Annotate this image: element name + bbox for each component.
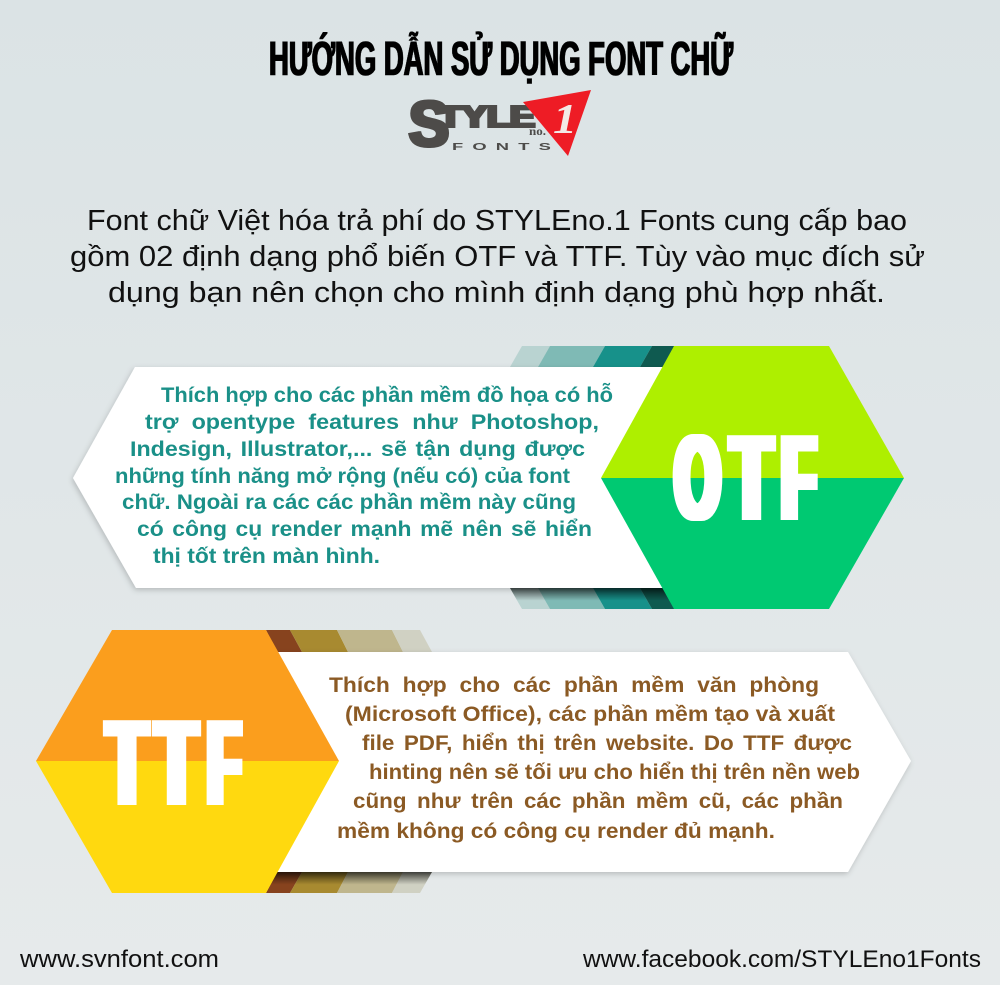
logo: STYLEno.1 Fonts: S xyxy=(409,88,449,160)
OTF label xyxy=(675,412,816,544)
OTF description: thị tốt trên màn hình. xyxy=(153,545,380,568)
TTF description: cũng như trên các phần mềm cũ, các phần xyxy=(353,790,843,813)
TTF white arrow banner xyxy=(270,652,911,872)
TTF description: mềm không có công cụ render đủ mạnh. xyxy=(337,820,775,843)
OTF description: Thích hợp cho các phần mềm đồ họa có hỗ xyxy=(161,383,613,407)
OTF description: Indesign, Illustrator,... sẽ tận dụng được xyxy=(130,438,585,461)
OTF white arrow banner xyxy=(73,367,680,588)
OTF label: O xyxy=(675,412,720,544)
TTF description: (Microsoft Office), các phần mềm tạo và xuất xyxy=(345,703,835,726)
OTF description xyxy=(115,383,613,568)
logo: STYLEno.1 Fonts: TYLE xyxy=(439,99,535,134)
logo: STYLEno.1 Fonts: FONTS xyxy=(452,142,560,153)
logo: STYLEno.1 Fonts: 1 xyxy=(553,97,577,143)
TTF label: T xyxy=(107,696,147,830)
intro paragraph: Font chữ Việt hóa trả phí do STYLEno.1 Fonts cung cấp bao xyxy=(87,205,907,237)
TTF description: file PDF, hiển thị trên website. Do TTF được xyxy=(362,732,852,755)
OTF bottom stripes xyxy=(510,588,676,609)
TTF label xyxy=(107,696,240,830)
logo: STYLEno.1 Fonts xyxy=(409,88,591,160)
TTF hexagon xyxy=(36,630,339,893)
OTF description: những tính năng mở rộng (nếu có) của font xyxy=(115,465,570,488)
TTF description xyxy=(329,674,860,843)
panel: OTF xyxy=(73,346,904,609)
TTF bottom stripes xyxy=(266,872,432,893)
TTF description: hinting nên sẽ tối ưu cho hiển thị trên nền web xyxy=(369,761,860,784)
intro paragraph xyxy=(70,205,925,309)
TTF top stripes xyxy=(266,630,432,652)
TTF label: T xyxy=(156,696,197,830)
OTF description: chữ. Ngoài ra các các phần mềm này cũng xyxy=(122,491,576,514)
OTF hexagon xyxy=(601,346,904,609)
OTF description: có công cụ render mạnh mẽ nên sẽ hiển xyxy=(137,518,592,541)
footer website link: www.svnfont.com xyxy=(19,946,219,973)
OTF label: T xyxy=(731,412,772,544)
panel: TTF: F xyxy=(208,696,240,830)
OTF top stripes xyxy=(510,346,676,367)
panel: OTF: F xyxy=(782,412,816,544)
OTF description: trợ opentype features như Photoshop, xyxy=(145,411,599,434)
panel: TTF xyxy=(36,630,911,893)
TTF description: Thích hợp cho các phần mềm văn phòng xyxy=(329,674,819,697)
intro paragraph: gồm 02 định dạng phổ biến OTF và TTF. Tùy vào mục đích sử xyxy=(70,241,925,273)
footer facebook link: www.facebook.com/STYLEno1Fonts xyxy=(582,946,981,973)
logo: STYLEno.1 Fonts: no. xyxy=(529,124,546,138)
intro paragraph: dụng bạn nên chọn cho mình định dạng phù hợp nhất. xyxy=(108,277,885,309)
